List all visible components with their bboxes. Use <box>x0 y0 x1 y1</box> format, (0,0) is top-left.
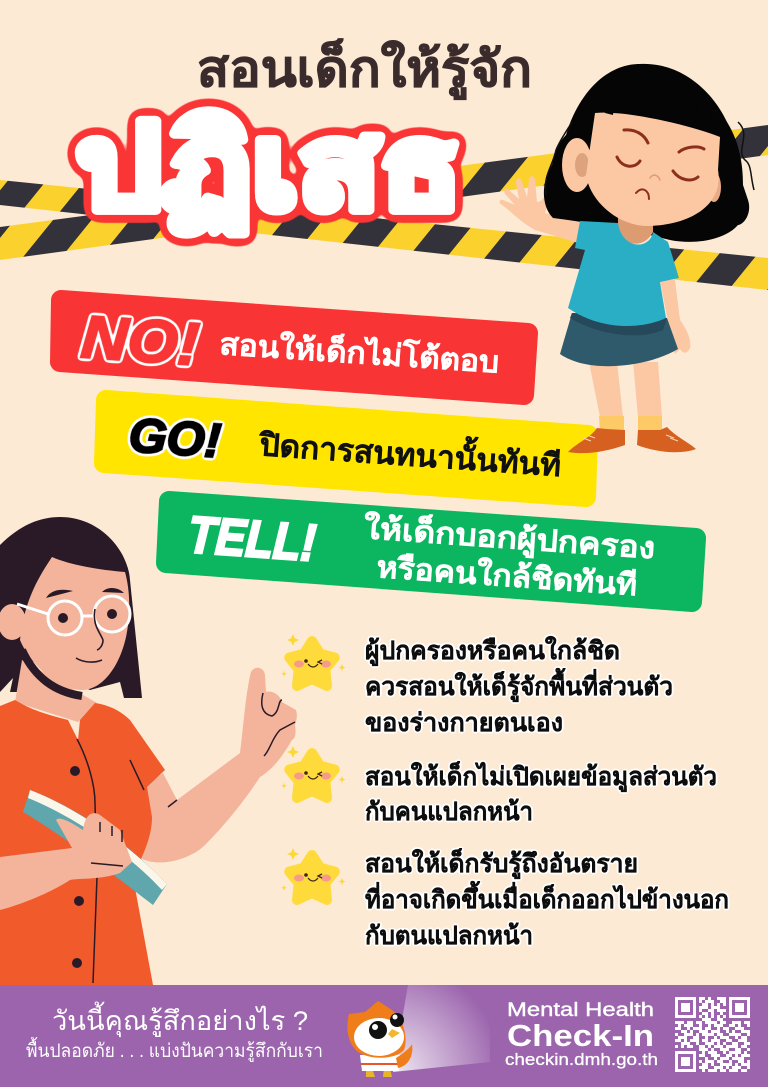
GO label: GO! <box>127 409 223 468</box>
tip text 3: สอนให้เด็กรับรู้ถึงอันตราย <box>365 848 638 880</box>
illustration: woman <box>0 517 297 985</box>
woman lower arm and hand <box>0 813 132 910</box>
girl ear <box>562 138 592 192</box>
girl fringe tips <box>605 95 713 130</box>
footer band <box>0 985 768 1087</box>
star bullet 3 <box>281 848 346 900</box>
star bullet 2 <box>281 746 346 798</box>
website label: checkin.dmh.go.th <box>505 1050 658 1069</box>
dress line and buttons <box>70 739 144 983</box>
woman neck shadow line <box>22 650 82 696</box>
tip text 1: ควรสอนให้เด็รู้จักพื้นที่ส่วนตัว <box>365 667 673 703</box>
tip text 3 <box>365 848 729 950</box>
tip text 3: ที่อาจเกิดขึ้นเมื่อเด็กออกไปข้างนอก <box>365 880 729 914</box>
girl face <box>586 113 720 226</box>
woman neck <box>15 660 97 722</box>
woman glasses <box>17 596 130 635</box>
owl head <box>347 1001 406 1058</box>
green panel <box>166 501 696 602</box>
caution tape: falling band <box>0 180 768 290</box>
caution tape: rising band <box>0 125 768 260</box>
woman book <box>23 790 167 905</box>
illustration: girl <box>499 64 754 453</box>
owl face <box>354 1018 404 1056</box>
tip text 2: กับคนแปลกหน้า <box>365 798 533 826</box>
tip text 1: ของร่างกายตนเอง <box>365 709 563 737</box>
footer subtitle: พื้นปลอดภัย . . . แบ่งปันความรู้สึกกับเรา <box>26 1037 323 1062</box>
QR code <box>675 998 750 1070</box>
banner: GO <box>104 400 588 497</box>
woman ear <box>0 604 26 640</box>
girl raised arm and hand <box>499 176 585 245</box>
NO label: NO! <box>79 303 201 378</box>
girl right arm <box>660 280 690 354</box>
owl body <box>360 1055 400 1071</box>
footer question: วันนี้คุณรู้สึกอย่างไร ? <box>52 1001 308 1038</box>
owl eyes <box>369 1021 387 1039</box>
banner: TELL <box>166 501 696 602</box>
woman hair <box>0 517 142 698</box>
TELL label: TELL! <box>186 506 318 573</box>
owl wing <box>396 1044 412 1068</box>
girl skirt <box>560 313 678 366</box>
NO description: สอนให้เด็กไม่โต้ตอบ <box>219 325 500 380</box>
girl legs <box>589 362 662 417</box>
Check-In label: Check-In <box>507 1018 654 1053</box>
tip text 2 <box>365 761 717 826</box>
girl shoes <box>568 427 696 453</box>
owl mascot with light beam <box>347 985 490 1077</box>
Mental Health label: Mental Health <box>507 1000 654 1021</box>
woman face <box>20 557 129 690</box>
girl facial features <box>617 130 704 199</box>
tip text 3: กับตนแปลกหน้า <box>365 922 533 950</box>
woman dress <box>0 700 165 985</box>
woman finger lines <box>91 822 123 866</box>
TELL description: หรือคนใกล้ชิดทันที <box>376 549 638 602</box>
TELL description: ให้เด็กบอกผู้ปกครอง <box>362 509 656 567</box>
title line: สอนเด็กให้รู้จัก <box>197 38 532 100</box>
red panel <box>60 300 528 395</box>
banner: NO <box>60 300 528 395</box>
owl beak <box>388 1029 400 1038</box>
yellow panel <box>104 400 588 497</box>
light beam <box>393 985 490 1072</box>
woman hand lines <box>168 693 295 807</box>
girl hair <box>544 64 749 242</box>
tip text 2: สอนให้เด็กไม่เปิดเผยข้อมูลส่วนตัว <box>365 761 717 793</box>
tip text 1 <box>365 635 673 737</box>
woman raised arm and hand <box>135 668 297 862</box>
owl feet <box>366 1068 392 1077</box>
TELL description <box>362 509 656 602</box>
star bullet 1 <box>281 634 346 686</box>
girl neck <box>618 215 653 244</box>
girl shirt <box>568 221 679 326</box>
woman eyes, brows, nose and smile <box>46 588 124 662</box>
girl back ear shade <box>707 172 721 202</box>
girl socks <box>599 416 662 432</box>
title keyword: ปฏิเสธ: ปฏิเสธ <box>76 102 462 235</box>
tip text 1: ผู้ปกครองหรือคนใกล้ชิด <box>365 635 620 667</box>
GO description: ปิดการสนทนานั้นทันที <box>257 421 563 483</box>
